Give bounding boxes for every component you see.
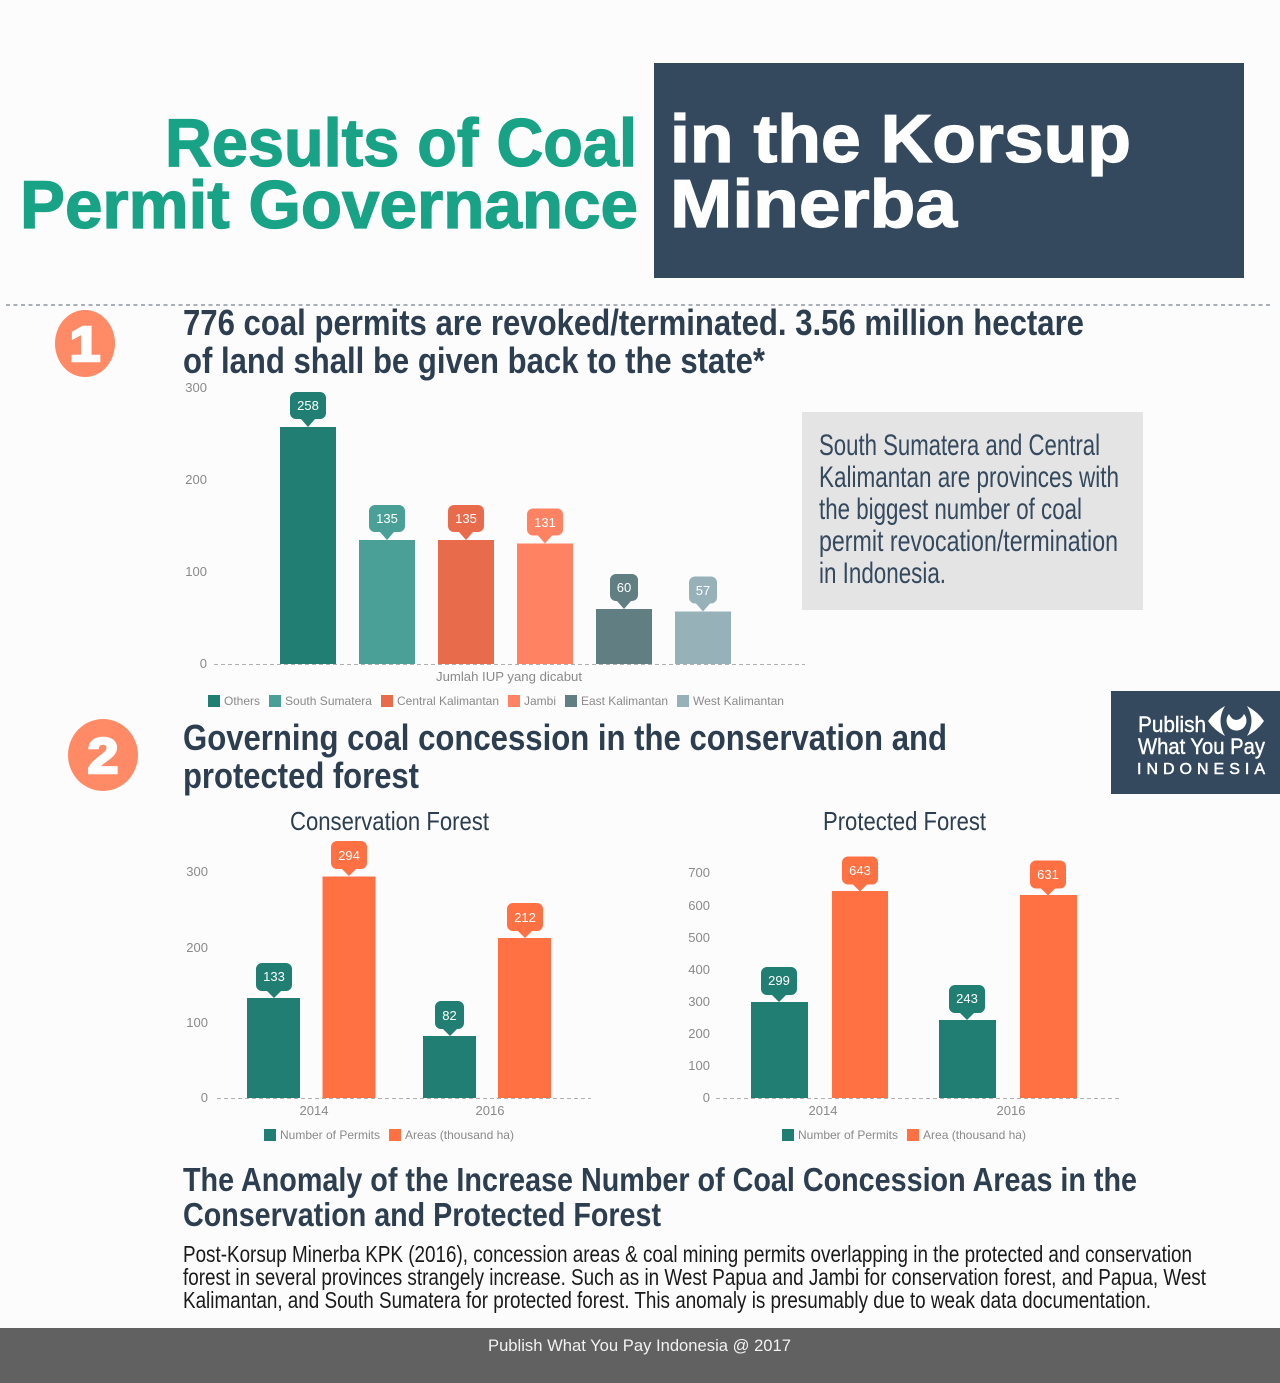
anomaly body text bbox=[183, 1241, 1206, 1313]
y axis labels: 100 bbox=[185, 564, 207, 579]
logo: Publish What You Pay Indonesia: INDONESIA bbox=[1137, 761, 1265, 778]
y axis labels: 500 bbox=[688, 930, 710, 945]
bar: Jambi 131 bbox=[517, 508, 573, 664]
anomaly heading: Conservation and Protected Forest bbox=[183, 1196, 661, 1233]
legend: West Kalimantan bbox=[693, 694, 784, 708]
title: green part: Results of Coal bbox=[165, 105, 637, 181]
footer: Publish What You Pay Indonesia @ 2017 bbox=[488, 1336, 791, 1355]
y axis labels: 0 bbox=[201, 1090, 208, 1105]
y axis labels bbox=[186, 864, 208, 1105]
y axis labels: 0 bbox=[703, 1090, 710, 1105]
logo: Publish What You Pay Indonesia bbox=[1111, 691, 1280, 794]
y axis labels: 0 bbox=[200, 656, 207, 671]
axis caption: Jumlah IUP yang dicabut bbox=[436, 669, 582, 684]
title: navy panel bbox=[654, 63, 1244, 278]
y axis labels: 700 bbox=[688, 865, 710, 880]
callout box: key finding: Kalimantan are provinces with bbox=[819, 461, 1119, 494]
legend: Area (thousand ha) bbox=[923, 1128, 1026, 1142]
section 1 heading: of land shall be given back to the state* bbox=[183, 340, 765, 381]
bar: permits 2016: 82 bbox=[442, 1008, 457, 1023]
y axis labels: 200 bbox=[688, 1026, 710, 1041]
y axis labels bbox=[185, 380, 207, 671]
bar: permits 2016: 243 bbox=[956, 991, 978, 1006]
legend: East Kalimantan bbox=[581, 694, 668, 708]
logo: Publish What You Pay Indonesia: Publish bbox=[1138, 712, 1206, 737]
bar: East Kalimantan 60: 60 bbox=[617, 580, 631, 595]
y axis labels: 100 bbox=[688, 1058, 710, 1073]
bar: South Sumatera 135: 135 bbox=[376, 511, 398, 526]
y axis labels bbox=[688, 865, 710, 1105]
section 2 heading: Governing coal concession in the conservation and bbox=[183, 717, 947, 758]
bar: permits 2014: 299 bbox=[768, 973, 790, 988]
bar: permits 2014 bbox=[751, 967, 808, 1098]
section 1 heading: 776 coal permits are revoked/terminated. 3.56 million hectare bbox=[183, 302, 1084, 343]
title: green part bbox=[20, 105, 638, 243]
bar: West Kalimantan 57: 57 bbox=[696, 583, 710, 598]
bar: Central Kalimantan 135: 135 bbox=[455, 511, 477, 526]
anomaly heading: The Anomaly of the Increase Number of Coal Concession Areas in the bbox=[183, 1161, 1137, 1198]
category labels: 2016 bbox=[997, 1103, 1025, 1118]
legend: Number of Permits bbox=[798, 1128, 898, 1142]
y axis labels: 200 bbox=[185, 472, 207, 487]
bar: area 2014 bbox=[832, 856, 888, 1098]
bar: areas 2016: 212 bbox=[514, 910, 536, 925]
category labels: 2014 bbox=[809, 1103, 837, 1118]
callout box: key finding: South Sumatera and Central bbox=[819, 429, 1100, 462]
y axis labels: 300 bbox=[186, 864, 208, 879]
bar: area 2016 bbox=[1020, 860, 1077, 1098]
legend: Jambi bbox=[524, 694, 556, 708]
bar: areas 2014 bbox=[322, 841, 376, 1098]
legend bbox=[782, 1128, 1026, 1142]
bar: permits 2016 bbox=[423, 1001, 476, 1098]
legend: Number of Permits bbox=[280, 1128, 380, 1142]
bar: permits 2014 bbox=[247, 963, 300, 1098]
bar: South Sumatera 135 bbox=[359, 505, 415, 664]
anomaly heading bbox=[183, 1161, 1137, 1233]
legend: Others bbox=[224, 694, 260, 708]
icon: eye bbox=[1208, 706, 1264, 736]
y axis labels: 400 bbox=[688, 962, 710, 977]
bar: permits 2016 bbox=[939, 985, 996, 1098]
section 1 number badge: 1 bbox=[70, 318, 100, 372]
y axis labels: 300 bbox=[185, 380, 207, 395]
category labels bbox=[300, 1103, 504, 1118]
category labels: 2014 bbox=[300, 1103, 328, 1118]
callout box: key finding bbox=[802, 412, 1143, 610]
legend bbox=[208, 694, 784, 708]
section 1 number badge bbox=[55, 310, 115, 377]
callout box: key finding: the biggest number of coal bbox=[819, 493, 1082, 526]
section 2 number badge: 2 bbox=[88, 728, 118, 784]
bar: Others 258: 258 bbox=[297, 398, 319, 413]
bar: areas 2014: 294 bbox=[338, 848, 360, 863]
bar: Central Kalimantan 135 bbox=[438, 505, 494, 664]
bar: area 2014: 643 bbox=[849, 863, 871, 878]
bar: areas 2016 bbox=[498, 903, 551, 1098]
legend: Central Kalimantan bbox=[397, 694, 499, 708]
bar: area 2016: 631 bbox=[1037, 867, 1059, 882]
bar chart: protected forest bbox=[688, 806, 1119, 1142]
category labels bbox=[809, 1103, 1025, 1118]
bar: Jambi 131: 131 bbox=[534, 515, 556, 530]
bar: West Kalimantan 57 bbox=[675, 576, 731, 664]
chart title: Conservation Forest bbox=[290, 806, 490, 836]
logo: Publish What You Pay Indonesia: What You Pay bbox=[1138, 734, 1265, 759]
callout box: key finding: in Indonesia. bbox=[819, 557, 946, 590]
y axis labels: 200 bbox=[186, 940, 208, 955]
bar chart: revoked permits by province bbox=[185, 380, 805, 708]
footer bbox=[0, 1328, 1280, 1383]
y axis labels: 300 bbox=[688, 994, 710, 1009]
title: navy panel: in the Korsup bbox=[670, 101, 1131, 177]
section 2 heading bbox=[183, 717, 947, 796]
callout box: key finding: permit revocation/termination bbox=[819, 525, 1118, 558]
bar: Others 258 bbox=[280, 392, 336, 664]
category labels: 2016 bbox=[476, 1103, 504, 1118]
section 1 heading bbox=[183, 302, 1084, 381]
section 2 number badge bbox=[68, 719, 138, 791]
bar: East Kalimantan 60 bbox=[596, 574, 652, 664]
section 2 heading: protected forest bbox=[183, 755, 419, 796]
title: navy panel: Minerba bbox=[670, 166, 958, 242]
legend: South Sumatera bbox=[285, 694, 372, 708]
y axis labels: 600 bbox=[688, 898, 710, 913]
y axis labels: 100 bbox=[186, 1015, 208, 1030]
title: green part: Permit Governance bbox=[20, 167, 638, 243]
bar: permits 2014: 133 bbox=[263, 969, 285, 984]
legend bbox=[264, 1128, 514, 1142]
chart title: Protected Forest bbox=[823, 806, 987, 836]
legend: Areas (thousand ha) bbox=[405, 1128, 514, 1142]
bar chart: conservation forest bbox=[186, 806, 591, 1142]
